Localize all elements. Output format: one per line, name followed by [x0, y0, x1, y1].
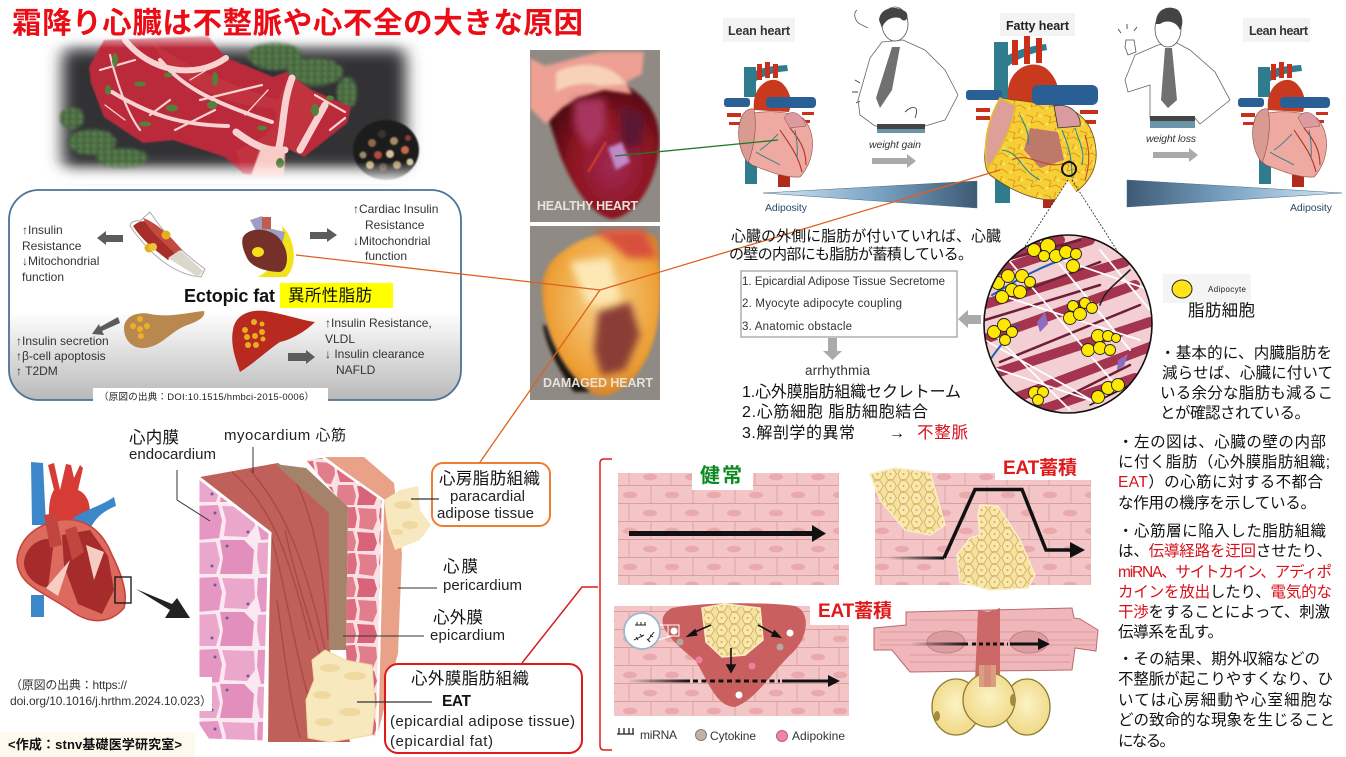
callout: epicardial adipose tissue: 心外膜脂肪組織 — [411, 669, 529, 688]
inflamed area — [663, 603, 806, 707]
photo: marbled beef — [40, 30, 425, 184]
source note: wall figure — [10, 678, 212, 708]
text: fat on heart description — [729, 228, 1001, 263]
heading: ectopic fat: Ectopic fat — [184, 286, 275, 306]
chart: adiposity wedge left — [763, 181, 977, 214]
arrow: interrupted conduction — [910, 638, 1050, 650]
callout: epicardial adipose tissue: EAT — [442, 693, 472, 710]
connector: healthy heart to lean heart — [615, 140, 778, 156]
marker: magnified spot — [1062, 162, 1076, 176]
callout: epicardial adipose tissue: (epicardial fat) — [390, 733, 493, 750]
source note: wall figure: （原図の出典：https:// — [10, 678, 128, 692]
text: disruption of conduction — [1118, 522, 1332, 641]
text: consequences — [1118, 650, 1335, 750]
arrow: box to arrhythmia — [823, 338, 842, 360]
text: skeletal muscle effects: ↑Insulin — [22, 223, 63, 237]
fat pad: paracardial — [384, 486, 431, 550]
callout: paracardial adipose tissue — [411, 463, 550, 526]
callout: paracardial adipose tissue: adipose tissue — [437, 505, 534, 522]
text: pancreas effects: ↑β-cell apoptosis — [16, 349, 106, 363]
text: numbered mechanisms in japanese: 不整脈 — [917, 423, 968, 442]
text: numbered mechanisms in japanese — [742, 383, 968, 442]
icon: liver — [232, 311, 315, 372]
illustration: man with weight gain — [852, 7, 958, 133]
fat deposit: upper — [870, 468, 945, 535]
highlight: ectopic fat japanese — [280, 283, 393, 308]
arrow: detail enlargement — [136, 589, 190, 618]
text: consequences: 不整脈が起こりやすくなり、ひ — [1118, 670, 1333, 688]
credit: <作成：stnv基礎医学研究室> — [8, 737, 182, 752]
text: consequences: どの致命的な現象を生じること — [1118, 711, 1335, 729]
label: fatty heart: Fatty heart — [1006, 19, 1070, 33]
labels: myocardium — [224, 427, 346, 473]
illustration: man after weight loss — [1118, 8, 1230, 128]
panel: paracrine signalling — [614, 597, 905, 716]
chart: adiposity wedge right — [1127, 180, 1342, 214]
legend: signalling molecules: miRNA — [640, 728, 677, 742]
text: visceral fat note: 減らせば、心臓に付いて — [1162, 364, 1333, 382]
labels: pericardium: pericardium — [443, 577, 522, 594]
chart: adiposity wedge right: Adiposity — [1290, 202, 1333, 214]
icon: muscle — [130, 212, 205, 277]
text: figure explanation: ・左の図は、心臓の壁の内部 — [1118, 433, 1326, 451]
title: 霜降り心臓は不整脈や心不全の大きな原因 — [12, 7, 583, 40]
text: skeletal muscle effects: function — [22, 270, 64, 284]
illustration: heart wall tissue block — [190, 457, 431, 742]
text: liver effects: ↑Insulin Resistance, — [325, 316, 432, 330]
panel: ectopic fat — [9, 190, 461, 400]
label: fatty heart — [1000, 13, 1075, 36]
text: disruption of conduction: カインを放出したり、電気的な — [1118, 583, 1332, 601]
arrow: weight loss — [1153, 148, 1198, 162]
text: figure explanation: な作用の機序を示している。 — [1118, 494, 1316, 512]
source note: ectopic fat: （原図の出典：DOI:10.1515/hmbci-2015-0006） — [99, 391, 314, 403]
labels: pericardium — [398, 557, 522, 594]
text: disruption of conduction: miRNA、サイトカイン、アディポ — [1118, 562, 1332, 581]
text: consequences: いては心房細動や心室細胞な — [1118, 691, 1333, 709]
callout: epicardial adipose tissue: (epicardial adipose tissue) — [390, 713, 575, 730]
herbs — [60, 42, 357, 168]
labels: myocardium: myocardium 心筋 — [224, 427, 346, 444]
text: liver effects: ↓ Insulin clearance — [325, 347, 425, 361]
connector: orange leader lines — [296, 170, 1000, 465]
text: cardiac effects: function — [365, 249, 407, 263]
adipocytes — [932, 673, 1050, 735]
label: healthy — [692, 463, 753, 490]
labels: epicardium: 心外膜 — [433, 608, 483, 627]
labels: epicardium — [343, 608, 505, 644]
labels: endocardium: endocardium — [129, 446, 216, 463]
text: liver effects: VLDL — [325, 332, 355, 346]
text: cardiac effects: ↓Mitochondrial — [353, 234, 430, 248]
source note: ectopic fat — [93, 388, 328, 406]
text: disruption of conduction: 伝導系を乱す。 — [1118, 623, 1223, 641]
illustration: heart cross-section — [17, 462, 131, 621]
box: arrhythmia mechanisms: 3. Anatomic obstacle — [742, 321, 852, 333]
text: fat on heart description: の壁の内部にも脂肪が蓄積している。 — [729, 246, 973, 263]
text: consequences: になる。 — [1118, 732, 1175, 750]
arrow: weight gain — [872, 154, 916, 168]
text: visceral fat note: いる余分な脂肪も減るこ — [1160, 384, 1333, 402]
legend: adipocyte: Adipocyte — [1208, 285, 1247, 294]
marker: wall detail rectangle — [115, 577, 131, 603]
text: arrhythmia: arrhythmia — [805, 363, 870, 378]
photo: damaged heart — [530, 226, 660, 400]
box: arrhythmia mechanisms — [741, 271, 957, 337]
arrow: muscle to effects — [97, 231, 123, 245]
highlight: ectopic fat japanese: 異所性脂肪 — [288, 286, 372, 305]
label: EAT accumulation — [995, 450, 1093, 480]
legend: adipocyte — [1163, 274, 1255, 320]
fat pad: epicardial — [306, 650, 375, 742]
icon: heart with fat — [242, 216, 294, 277]
callout: zoom lens cone — [1020, 180, 1118, 254]
arrow: straight conduction — [629, 525, 826, 542]
photo: damaged heart: DAMAGED HEART — [543, 376, 653, 390]
label: lean heart left — [723, 18, 795, 42]
icon: fatty heart — [966, 36, 1098, 208]
arrow: slowed conduction — [627, 675, 840, 687]
illustration: magnified myocardium with adipocytes — [982, 235, 1155, 413]
text: fat on heart description: 心臓の外側に脂肪が付いていれば、心臓 — [731, 228, 1001, 245]
photo: healthy heart — [530, 50, 660, 222]
photo: healthy heart: HEALTHY HEART — [537, 199, 638, 213]
labels: endocardium — [129, 428, 216, 521]
labels: epicardium: epicardium — [430, 627, 505, 644]
fat deposit — [702, 604, 763, 657]
text: disruption of conduction: は、伝導経路を迂回させたり、 — [1118, 542, 1332, 560]
icon: pancreas — [124, 311, 204, 348]
text: figure explanation — [1118, 433, 1330, 512]
label: lean heart left: Lean heart — [728, 24, 791, 38]
text: skeletal muscle effects: ↓Mitochondrial — [22, 254, 99, 268]
text: cardiac effects: ↑Cardiac Insulin — [353, 202, 438, 216]
source note: wall figure: doi.org/10.1016/j.hrthm.2024.10.023） — [10, 694, 212, 708]
label: EAT accumulation — [810, 597, 905, 625]
text: cardiac effects: Resistance — [365, 218, 425, 232]
arrows: secretion — [688, 625, 780, 672]
magnifier: miRNA — [624, 613, 679, 649]
chart: adiposity wedge left: Adiposity — [765, 202, 808, 214]
arrow: liver to effects — [288, 350, 315, 364]
label: weight gain: weight gain — [869, 139, 921, 151]
label: lean heart right — [1243, 18, 1310, 42]
text: consequences: ・その結果、期外収縮などの — [1118, 650, 1320, 668]
text: numbered mechanisms in japanese: 2.心筋細胞 脂肪細胞結合 — [742, 403, 928, 421]
text: figure explanation: に付く脂肪（心外膜脂肪組織; — [1118, 453, 1330, 471]
legend: signalling molecules: Adipokine — [792, 729, 845, 743]
legend: signalling molecules: Cytokine — [710, 729, 756, 743]
text: figure explanation: EAT）の心筋に対する不都合 — [1118, 473, 1323, 491]
arrow: heart to effects — [310, 228, 337, 242]
label: EAT accumulation: EAT蓄積 — [1003, 457, 1077, 479]
icon: lean heart right — [1238, 62, 1330, 187]
panel: healthy conduction — [618, 463, 839, 585]
label: weight loss: weight loss — [1146, 133, 1197, 145]
callout: paracardial adipose tissue: paracardial — [450, 488, 525, 505]
legend: adipocyte: 脂肪細胞 — [1188, 301, 1255, 320]
legend: signalling molecules — [617, 728, 845, 743]
box: arrhythmia mechanisms: 2. Myocyte adipocyte coupling — [742, 298, 902, 310]
text: numbered mechanisms in japanese: 3.解剖学的異常 — [742, 424, 855, 442]
fat deposit: lower — [957, 505, 1035, 590]
text: disruption of conduction: 干渉をすることによって、刺激 — [1118, 603, 1330, 621]
text: pancreas effects: ↑ T2DM — [16, 364, 58, 378]
text: liver effects: NAFLD — [336, 363, 376, 377]
arrow: detoured conduction — [888, 490, 1085, 560]
connector and bracket: EAT mechanisms — [522, 459, 612, 750]
text: skeletal muscle effects: Resistance — [22, 239, 82, 253]
molecules — [676, 630, 794, 698]
icon: lean heart left — [724, 62, 816, 187]
text: visceral fat note: ・基本的に、内臓脂肪を — [1160, 344, 1332, 362]
text: numbered mechanisms in japanese: 1.心外膜脂肪組織セクレトーム — [742, 383, 961, 401]
credit — [0, 732, 195, 757]
panel: electrical interference — [874, 608, 1098, 735]
label: EAT accumulation: EAT蓄積 — [818, 600, 892, 622]
box: arrhythmia mechanisms: 1. Epicardial Adipose Tissue Secretome — [742, 276, 945, 288]
arrow: lens to box — [958, 310, 981, 328]
text: numbered mechanisms in japanese: → — [889, 425, 905, 442]
callout: paracardial adipose tissue: 心房脂肪組織 — [439, 469, 540, 488]
label: lean heart right: Lean heart — [1249, 24, 1309, 38]
text: disruption of conduction: ・心筋層に陥入した脂肪組織 — [1118, 522, 1326, 540]
labels: pericardium: 心膜 — [443, 557, 478, 576]
arrow: pancreas to effects — [92, 317, 120, 335]
panel: detour of conduction — [870, 450, 1093, 590]
text: visceral fat note: とが確認されている。 — [1160, 404, 1310, 422]
label: healthy: 健常 — [700, 464, 742, 487]
text: visceral fat note — [1160, 344, 1333, 422]
text: pancreas effects: ↑Insulin secretion — [16, 334, 109, 348]
callout: epicardial adipose tissue — [357, 664, 582, 753]
labels: endocardium: 心内膜 — [129, 428, 179, 447]
